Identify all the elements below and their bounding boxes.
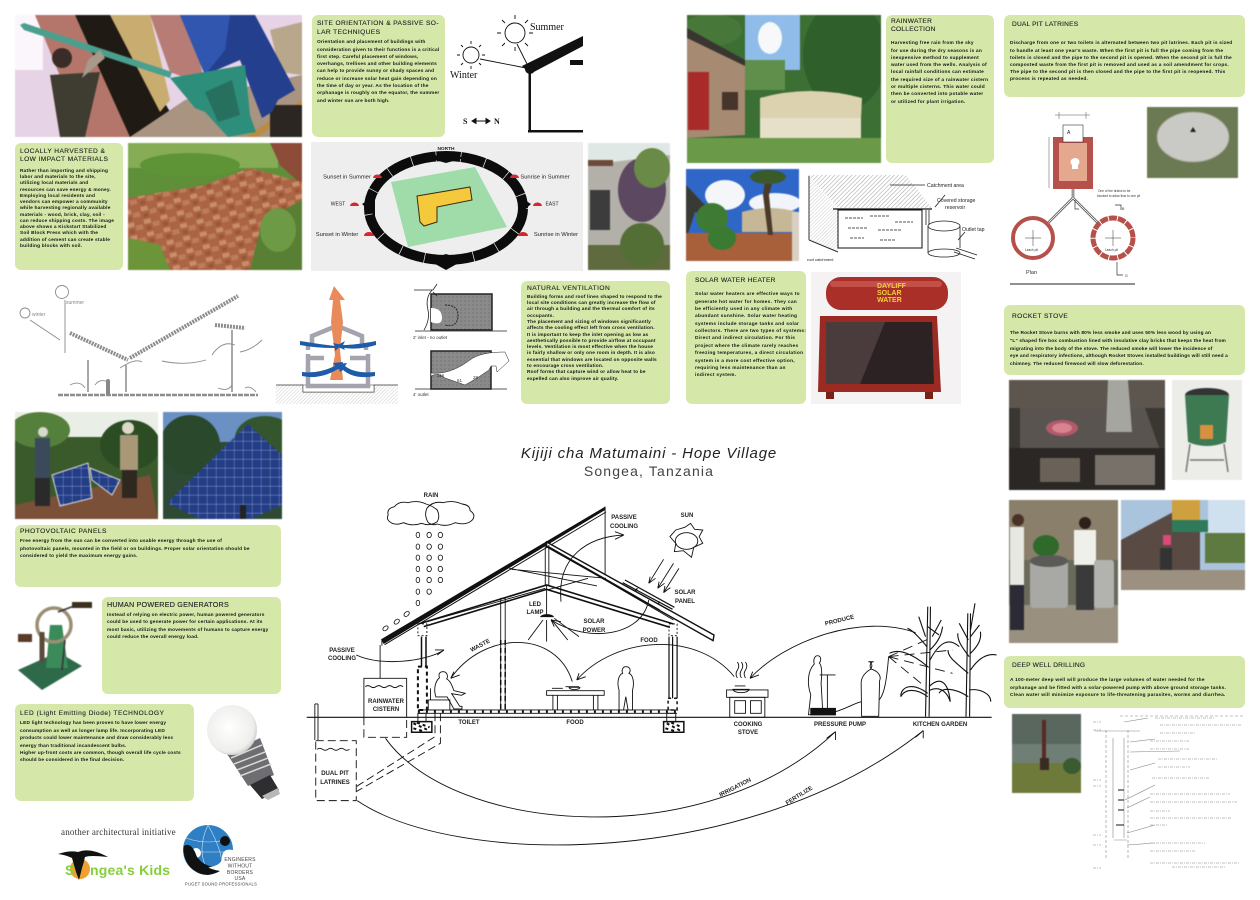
diagram: roof catchment and storage reservoir: Covered storage xyxy=(937,198,975,204)
rainwater cistern xyxy=(364,645,407,737)
solar panel xyxy=(623,580,674,609)
diagram: inlet and outlet airflow: 28 xyxy=(473,375,479,380)
body text: to encourage cross ventilation. xyxy=(527,364,603,369)
body text: consideration given to their functions is a critical xyxy=(317,48,439,53)
diagram: latrine plan with twin pits: One of the drains to be xyxy=(1098,189,1131,193)
diagram: summer and winter sun angles: Winter xyxy=(450,70,478,81)
body text: requiring less maintenance than an xyxy=(695,366,786,371)
panel: dual pit latrines xyxy=(1004,15,1245,97)
heading: SOLAR WATER HEATER xyxy=(695,276,776,284)
body text: A 100-meter deep well will produce the large volumes of water needed for the xyxy=(1010,678,1205,683)
diagram labels: COOLING xyxy=(610,524,638,530)
clouds xyxy=(387,502,474,525)
photo: pedal generator xyxy=(17,601,93,690)
logo: Songea's Kids: ngea's Kids xyxy=(90,862,170,878)
diagram: inlet and outlet airflow: 61 xyxy=(457,378,463,383)
heading: COLLECTION xyxy=(891,26,936,33)
heading: DEEP WELL DRILLING xyxy=(1012,662,1085,668)
logo: Songea's Kids: S xyxy=(65,862,74,878)
heading: HUMAN POWERED GENERATORS xyxy=(107,600,229,608)
body text: materials - wood, brick, clay, soil - xyxy=(20,213,105,218)
photo: built-in rocket stove with chimney xyxy=(1008,379,1166,491)
panel: photovoltaic panels xyxy=(15,525,281,587)
diagram: latrine plan with twin pits: Leach pit xyxy=(1105,248,1118,252)
body text: energy than traditional incandescent bulbs. xyxy=(20,744,126,749)
photo: well drilling rig xyxy=(1011,713,1082,794)
body text: the time of day or year. As the location of the xyxy=(317,84,429,89)
body text: Rather than importing and shipping xyxy=(20,169,108,174)
body text: could be used to generate power for certain applications. At its xyxy=(107,620,263,625)
body text: project where the climate rarely reaches xyxy=(695,344,798,349)
diagram labels: PASSIVE xyxy=(329,648,355,654)
photo: stacked soil bricks xyxy=(127,142,303,271)
heading: LAR TECHNIQUES xyxy=(317,28,380,36)
diagram: roof catchment and storage reservoir: Catchment area xyxy=(927,183,964,189)
diagram: latrine plan with twin pits: A xyxy=(1067,130,1071,136)
diagram: compass and building site plan: WEST xyxy=(331,202,345,208)
body text: Solar water heaters are effective ways to xyxy=(695,292,800,297)
logo: Engineers Without Borders USA xyxy=(180,822,265,886)
body text: It is important to keep the inlet opening as low as xyxy=(527,333,648,338)
body text: considered to yield the maximum energy gains. xyxy=(20,554,138,559)
body text: migrating into the body of the stove. The reduced smoke will lower the incidence of xyxy=(1010,347,1212,352)
diagram: compass and building site plan: Sunrise in Winter xyxy=(534,232,578,238)
diagram: stack-effect ventilation section xyxy=(276,286,398,404)
body text: or multiple cisterns. This water could xyxy=(891,85,985,90)
diagram labels: PRODUCE xyxy=(824,614,855,628)
body text: toilets is closed and the pipe to the second pit is opened. When the second pit is full the xyxy=(1010,56,1232,61)
body text: abundant sunshine. Solar water heating xyxy=(695,314,797,319)
body text xyxy=(891,40,988,105)
logo: Songea's Kids xyxy=(55,846,180,884)
body text: local site conditions can greatly increase the flow of xyxy=(527,301,656,306)
body text: local rainfall conditions can estimate xyxy=(891,70,984,75)
body text: Free energy from the sun can be converted into usable energy through the use of xyxy=(20,539,222,544)
body text: affects the cooling effect left from cross ventilation. xyxy=(527,326,655,331)
body text: system is a more cost effective option, xyxy=(695,359,795,364)
heading: LOW IMPACT MATERIALS xyxy=(20,156,108,163)
body text: The pipe to the second pit is then closed and the pipe to the first pit is reopened. This xyxy=(1010,70,1226,75)
photo: portable green rocket stove xyxy=(1172,380,1242,480)
diagram: latrine plan with twin pits: Plan xyxy=(1026,270,1037,276)
diagram labels: IRRIGATION xyxy=(719,778,752,799)
diagram labels: FOOD xyxy=(566,720,584,726)
body text: essential that windows are located on opposite walls xyxy=(527,358,657,363)
diagram: sketch of roof section with sun paths: summer xyxy=(66,300,84,306)
body text: process is repeated as needed. xyxy=(1010,77,1088,82)
body text: Roof forms that capture wind or allow heat to be xyxy=(527,370,646,375)
body text xyxy=(695,292,806,378)
body text: building blocks with soil. xyxy=(20,244,82,249)
panel: rainwater collection xyxy=(886,15,994,163)
photo: house with plants xyxy=(587,142,671,271)
heading: LOCALLY HARVESTED & xyxy=(20,148,105,155)
body text: composted waste from the first pit is removed and used as a soil amendment for crops. xyxy=(1010,63,1229,68)
photo: rainwater tank beside stone building xyxy=(686,14,882,164)
diagram: latrine plan with twin pits: blocked to allow flow to one pit xyxy=(1097,194,1140,198)
body text: photovoltaic panels, mounted in the field or on buildings. Proper solar orientation should be xyxy=(20,547,250,552)
diagram: inlet and outlet airflow xyxy=(413,284,510,397)
body text: generate hot water for homes. They can xyxy=(695,300,797,305)
body text: orphanage and be fitted with a solar-powered pump with above ground storage tanks. xyxy=(1010,686,1226,691)
diagram labels: PANEL xyxy=(675,599,695,605)
diagram labels: CISTERN xyxy=(373,707,399,713)
logo: Engineers Without Borders USA: WITHOUT xyxy=(228,864,252,870)
diagram: latrine plan with twin pits: G xyxy=(1125,274,1128,278)
body text: The placement and sizing of windows significantly xyxy=(527,320,651,325)
body text: or utilized for plant irrigation. xyxy=(891,100,966,105)
diagram: compass and building site plan: Sunset in Winter xyxy=(316,232,358,238)
body text: then be converted into potable water xyxy=(891,92,983,97)
body text: Harvesting free rain from the sky xyxy=(891,41,974,46)
body text: chimney. The reduced firewood will slow deforestation. xyxy=(1010,362,1144,367)
body text: while harvesting regionally available xyxy=(20,206,111,211)
corn plants xyxy=(890,603,997,717)
body text: should be considered in the final decision. xyxy=(20,758,124,763)
panel: deep well drilling xyxy=(1004,656,1245,708)
body text: Employing local residents and xyxy=(20,194,95,199)
diagram labels: RAINWATER xyxy=(368,699,405,705)
logo: Engineers Without Borders USA: USA xyxy=(235,876,246,882)
body text: could reduce the overall energy load. xyxy=(107,635,199,640)
main diagram: house section and resource cycle xyxy=(300,480,1000,880)
photo: workers carrying solar panel xyxy=(14,411,159,520)
diagram: inlet and outlet airflow: 2' inlet - no outlet xyxy=(413,335,448,340)
body text: can reduce shipping costs. The image xyxy=(20,219,114,224)
body text: reduce or increase solar heat gain depending on xyxy=(317,77,437,82)
body text: be efficiently used in any climate with xyxy=(695,307,793,312)
body text: and winter sun are both high. xyxy=(317,99,390,104)
diagram labels: COOKING xyxy=(734,722,763,728)
body text: occupants. xyxy=(527,314,554,319)
body text xyxy=(317,40,440,104)
diagram labels: KITCHEN GARDEN xyxy=(913,722,967,728)
diagram labels: SOLAR xyxy=(674,590,696,596)
body text: most basic, utilizing the movements of humans to capture energy xyxy=(107,628,268,633)
diagram labels: PASSIVE xyxy=(611,515,637,521)
body text: aesthetically possible to provide airflow at occupant xyxy=(527,339,656,344)
body text: first step. Careful placement of windows, xyxy=(317,55,418,60)
heading: RAINWATER xyxy=(891,18,932,24)
body text: vendors can empower a community xyxy=(20,200,108,205)
table and people xyxy=(428,667,633,710)
body text: addition of cement can create stable xyxy=(20,238,110,243)
diagram labels: WASTE xyxy=(470,638,491,654)
photo: LED bulb xyxy=(207,705,280,800)
body text: orphanage is roughly on the equator, the summer xyxy=(317,91,439,96)
walls and floor xyxy=(412,598,684,732)
diagram: summer and winter sun angles: S xyxy=(463,117,468,126)
title block xyxy=(521,445,777,479)
logo: Engineers Without Borders USA: ENGINEERS xyxy=(224,857,256,863)
body text xyxy=(1010,678,1226,698)
compass ring xyxy=(362,152,531,270)
heading: PHOTOVOLTAIC PANELS xyxy=(20,528,107,534)
diagram: roof catchment and storage reservoir xyxy=(807,175,985,262)
site plan xyxy=(391,167,507,247)
panel: solar water heater xyxy=(686,271,806,404)
body text: freezing temperatures, a direct circulation xyxy=(695,351,803,356)
body text: utilizing local materials and xyxy=(20,181,88,186)
diagram: latrine plan with twin pits xyxy=(1010,112,1140,284)
diagram: hand-drawn well section xyxy=(1093,716,1243,868)
LED lamp xyxy=(528,615,579,642)
panel: rocket stove xyxy=(1004,305,1245,375)
logo: Engineers Without Borders USA: BORDERS xyxy=(227,870,254,876)
body text: Discharge from one or two toilets is alternated between two pit latrines. Each pit is sized xyxy=(1010,41,1232,46)
body text: collectors. There are two types of systems: xyxy=(695,329,806,334)
diagram labels: FOOD xyxy=(640,638,658,644)
photo: tank with tree and visitors xyxy=(685,168,800,262)
diagram: compass and building site plan: Sunset in Summer xyxy=(323,174,371,180)
panel: human powered generators xyxy=(102,597,281,694)
resource flow arrows xyxy=(356,532,923,845)
heading: NATURAL VENTILATION xyxy=(527,284,610,292)
diagram labels: DUAL PIT xyxy=(321,771,349,777)
body text: products could lower maintenance and draw considerably less xyxy=(20,736,173,741)
heading xyxy=(20,148,108,163)
diagram: inlet and outlet airflow: 4' outlet xyxy=(413,392,429,397)
ground line xyxy=(307,716,992,718)
body text: above shows a Kickstart Stabilized xyxy=(20,225,107,230)
diagram: compass and building site plan: Sunrise in Summer xyxy=(520,174,570,180)
diagram labels: LAMP xyxy=(526,610,544,616)
heading: DUAL PIT LATRINES xyxy=(1012,20,1078,28)
body text: consumption as well as longer lamp life. Incorporating LED xyxy=(20,729,165,734)
diagram labels: POWER xyxy=(583,628,606,634)
diagram: compass and building site plan: NORTH xyxy=(437,146,455,152)
cooking stove xyxy=(727,662,768,717)
body text: LED light technology has been proven to have lower energy xyxy=(20,721,166,726)
body text: Higher up-front costs are common, though overall life cycle costs xyxy=(20,751,181,756)
diagram labels xyxy=(320,493,967,807)
diagram: latrine plan with twin pits: Leach pit xyxy=(1025,248,1038,252)
people at pressure pump xyxy=(808,656,889,716)
photo: solar panel array in forest xyxy=(162,411,283,520)
diagram: compass and building site plan: EAST xyxy=(545,202,559,208)
body text xyxy=(20,538,250,559)
dual pit latrine xyxy=(315,704,440,801)
body text: The Rocket Stove burns with 80% less smoke and uses 50% less wood by using an xyxy=(1010,331,1211,336)
body text: "L" shaped fire box combustion lined with insulative clay bricks that keeps the heat from xyxy=(1010,339,1226,344)
body text: air through a building and the thermal comfort of its xyxy=(527,307,655,312)
body text xyxy=(20,168,114,249)
body text: for use during the dry seasons is an xyxy=(891,49,982,54)
photo: concrete pit slab on grass xyxy=(1146,106,1239,179)
heading: LED (Light Emitting Diode) TECHNOLOGY xyxy=(20,710,164,716)
diagram: summer and winter sun angles xyxy=(450,15,583,132)
body text xyxy=(107,612,268,640)
diagram labels: COOLING xyxy=(328,656,356,662)
body text: indirect system. xyxy=(695,373,736,378)
body text: Soil Block Press which with the xyxy=(20,231,98,236)
logos block xyxy=(58,825,257,886)
diagram labels: STOVE xyxy=(738,730,758,736)
diagram labels: SOLAR xyxy=(584,619,605,625)
diagram: sketch of roof section with sun paths xyxy=(20,285,262,396)
body text: overhangs, trellises and other building elements xyxy=(317,62,437,67)
photo: roadside shop xyxy=(1120,499,1246,591)
body text: Building forms and roof lines shaped to respond to the xyxy=(527,295,662,300)
building xyxy=(417,187,472,226)
body text: Instead of relying on electric power, human powered generators xyxy=(107,613,265,618)
diagram: roof catchment and storage reservoir: reservoir xyxy=(945,205,965,211)
panel: locally harvested materials xyxy=(15,143,123,270)
diagram: summer and winter sun angles: N xyxy=(494,117,500,126)
photo: red solar water heater: DAYLIFF xyxy=(877,283,907,290)
body text: levels. Ventilation is most effective when the house xyxy=(527,345,653,350)
diagram: roof catchment and storage reservoir: roof catchment xyxy=(807,257,834,262)
body text: is fairly shallow or only one room in depth. It is also xyxy=(527,351,655,356)
diagram: compass and building site plan xyxy=(311,142,583,271)
caption: another architectural initiative xyxy=(61,827,176,837)
diagram: latrine plan with twin pits: B xyxy=(1122,207,1125,211)
photo: red solar water heater: WATER xyxy=(877,297,902,304)
body text: labor and materials to the site, xyxy=(20,175,96,180)
water spray xyxy=(889,639,952,683)
body text: systems include storage tanks and solar xyxy=(695,322,799,327)
photo: men with large stove pot xyxy=(1008,499,1119,644)
body text: expelled can also improve air quality. xyxy=(527,377,619,382)
panel: natural ventilation xyxy=(521,281,670,404)
body text xyxy=(1010,330,1228,367)
rain drops xyxy=(382,532,443,631)
heading: SITE ORIENTATION & PASSIVE SO- xyxy=(317,20,439,26)
diagram labels: FERTILIZE xyxy=(785,786,814,807)
body text: water used from the wells. Analysis of xyxy=(891,63,987,68)
body text: Clean water will minimize exposure to life-threatening parasites, worms and diarrhea. xyxy=(1010,693,1226,698)
photo: red solar water heater xyxy=(811,272,961,404)
body text: Orientation and placement of buildings with xyxy=(317,40,426,45)
diagram labels: RAIN xyxy=(424,493,438,499)
body text: Direct and indirect circulation. For this xyxy=(695,336,795,341)
diagram labels: SUN xyxy=(681,513,693,519)
diagram: roof catchment and storage reservoir: Outlet tap xyxy=(962,227,985,233)
body text: resources can save energy & money. xyxy=(20,188,111,193)
house roof and truss xyxy=(381,507,714,646)
diagram: sketch of roof section with sun paths: winter xyxy=(32,312,46,318)
body text: can help to provide sunny or shady spaces and xyxy=(317,69,434,74)
body text xyxy=(1010,40,1232,82)
body text: to handle at least one year's waste. When the first pit is full the pipe coming from the xyxy=(1010,49,1223,54)
diagram labels: TOILET xyxy=(458,720,480,726)
diagram labels: LATRINES xyxy=(320,780,350,786)
body text: inexpensive method to supplement xyxy=(891,56,979,61)
heading xyxy=(891,18,936,33)
panel: site orientation and passive solar xyxy=(312,15,445,137)
body text xyxy=(20,720,181,763)
title: Kijiji cha Matumaini - Hope Village xyxy=(521,445,777,462)
diagram: inlet and outlet airflow: 116 xyxy=(437,373,445,378)
body text: eye and respiratory infections, although Rocket Stoves installed buildings will still need a xyxy=(1010,354,1228,359)
diagram labels: LED xyxy=(529,602,542,608)
diagram labels: PRESSURE PUMP xyxy=(814,722,866,728)
photo: red solar water heater: SOLAR xyxy=(877,290,902,297)
sun xyxy=(649,523,703,593)
heading: ROCKET STOVE xyxy=(1012,312,1068,320)
photo: soil block press xyxy=(14,14,303,138)
diagram: summer and winter sun angles: Summer xyxy=(530,22,565,33)
subtitle: Songea, Tanzania xyxy=(584,463,714,479)
body text xyxy=(527,294,662,382)
heading xyxy=(317,20,439,36)
body text: the required size of a rainwater cistern xyxy=(891,78,988,83)
panel: LED technology xyxy=(15,704,194,801)
